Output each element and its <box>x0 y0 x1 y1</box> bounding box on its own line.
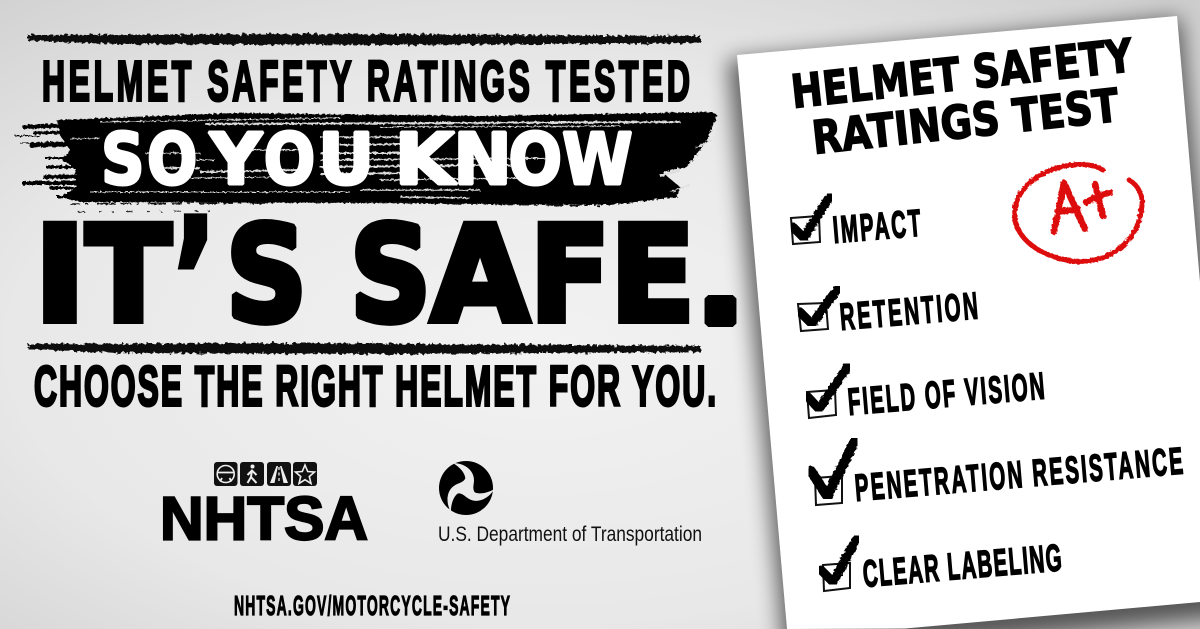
icon: star <box>293 462 317 486</box>
panel: test paper <box>737 16 1200 629</box>
checkbox <box>811 441 855 505</box>
checkbox <box>807 366 848 418</box>
heading: so you know: W <box>562 118 633 201</box>
heading: so you know <box>101 118 633 201</box>
label: RETENTION <box>838 285 979 339</box>
item: impact <box>791 196 923 252</box>
brush stroke: lower <box>29 344 700 353</box>
heading: it's safe <box>34 186 747 370</box>
checkbox <box>821 538 857 591</box>
heading: it's safe: A <box>431 198 529 352</box>
checkbox <box>798 288 838 331</box>
logo: US DOT <box>438 461 702 546</box>
heading: it's safe: S <box>226 198 307 352</box>
paper shadow <box>728 18 1200 629</box>
icon: road <box>267 462 291 486</box>
heading: so you know: O <box>264 118 315 201</box>
heading: so you know: O <box>147 118 197 201</box>
icon: pedestrian <box>240 462 264 486</box>
heading: it's safe: F <box>530 198 610 352</box>
heading: so you know: N <box>453 118 512 201</box>
heading: so you know: U <box>318 118 374 201</box>
logo: NHTSA <box>160 462 368 552</box>
item: penetration resistance <box>811 440 1184 510</box>
checkbox <box>791 196 830 244</box>
heading: so you know: O <box>508 118 562 201</box>
logo wordmark: NHTSA <box>160 484 368 552</box>
heading: so you know: S <box>101 118 145 201</box>
item: clear labeling <box>821 537 1063 596</box>
agency name: U.S. Department of Transportation <box>438 523 702 546</box>
paper heading line 1: HELMET SAFETY <box>788 28 1136 119</box>
label: PENETRATION RESISTANCE <box>853 440 1184 510</box>
item: field of vision <box>807 365 1046 424</box>
heading: it's safe: E <box>610 198 695 352</box>
heading: so you know: K <box>394 118 458 201</box>
heading: it's safe: I <box>34 198 86 352</box>
heading: it's safe: T <box>86 198 171 352</box>
icon: steering wheel <box>214 462 238 486</box>
url: NHTSA.GOV/MOTORCYCLE-SAFETY <box>234 590 510 621</box>
label: IMPACT <box>831 202 923 252</box>
icon: DOT triskelion <box>439 461 494 515</box>
label: FIELD OF VISION <box>846 365 1046 424</box>
heading: it's safe: S <box>350 198 431 352</box>
item: retention <box>798 285 979 339</box>
heading: it's safe: ’ <box>174 186 216 370</box>
label: CLEAR LABELING <box>861 537 1063 596</box>
grade: A+ <box>1015 165 1142 261</box>
brush stroke: main <box>15 112 717 212</box>
heading: it's safe: . <box>694 202 747 356</box>
brush stroke: top <box>29 35 700 44</box>
heading: so you know: Y <box>208 118 264 201</box>
heading: helmet safety ratings tested: HELMET SAFETY RATINGS TESTED <box>42 49 690 113</box>
subheading: choose the right helmet: CHOOSE THE RIGHT HELMET FOR YOU. <box>34 354 716 418</box>
paper heading line 2: RATINGS TEST <box>809 78 1122 165</box>
